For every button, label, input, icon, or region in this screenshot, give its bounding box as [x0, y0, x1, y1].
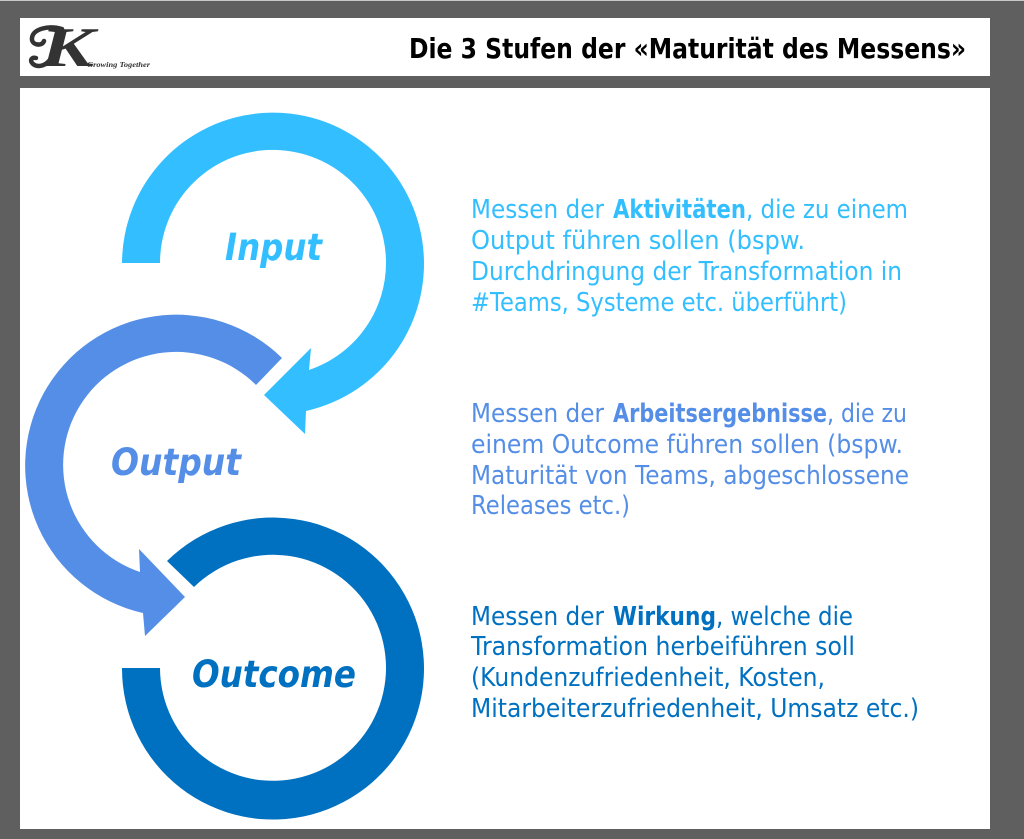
icon: K logo: Growing Together — [87, 61, 150, 69]
label: outcome: Outcome — [192, 653, 356, 696]
icon: K logo: K — [39, 17, 99, 79]
text block: input description — [471, 195, 908, 318]
text block: output description: Releases etc.) — [471, 491, 630, 521]
text block: output description — [471, 399, 909, 521]
icon: K logo — [31, 17, 150, 79]
text block: output description: einem Outcome führen sollen (bspw. — [471, 430, 903, 460]
text block: outcome description: Transformation herbeiführen soll — [470, 632, 855, 662]
text block: outcome description: Wirkung — [613, 602, 716, 632]
text block: outcome description: (Kundenzufriedenheit, Kosten, — [471, 663, 825, 693]
text block: input description: Output führen sollen (bspw. — [471, 226, 805, 256]
text block: output description: Arbeitsergebnisse — [613, 399, 827, 429]
text block: outcome description — [470, 602, 919, 724]
text block: input description: Aktivitäten — [613, 195, 746, 225]
text block: output description: Maturität von Teams, abgeschlossene — [471, 461, 909, 491]
label: output: Output — [111, 441, 242, 484]
arrow: output ring — [25, 315, 282, 636]
text block: input description: #Teams, Systeme etc. überführt) — [471, 288, 847, 318]
text block: output description: , die zu — [827, 399, 907, 429]
text block: outcome description: Messen der — [471, 602, 604, 632]
panel: header — [20, 17, 990, 79]
label: input: Input — [225, 226, 323, 269]
text block: outcome description: Mitarbeiterzufriedenheit, Umsatz etc.) — [471, 694, 919, 724]
text block: input description: Durchdringung der Transformation in — [471, 257, 902, 287]
arrow: outcome ring — [122, 518, 424, 820]
text block: input description: Messen der — [471, 195, 604, 225]
text block: input description: , die zu einem — [746, 195, 908, 225]
arrow: input ring — [122, 113, 424, 434]
text block: output description: Messen der — [471, 399, 604, 429]
text block: outcome description: , welche die — [716, 602, 853, 632]
